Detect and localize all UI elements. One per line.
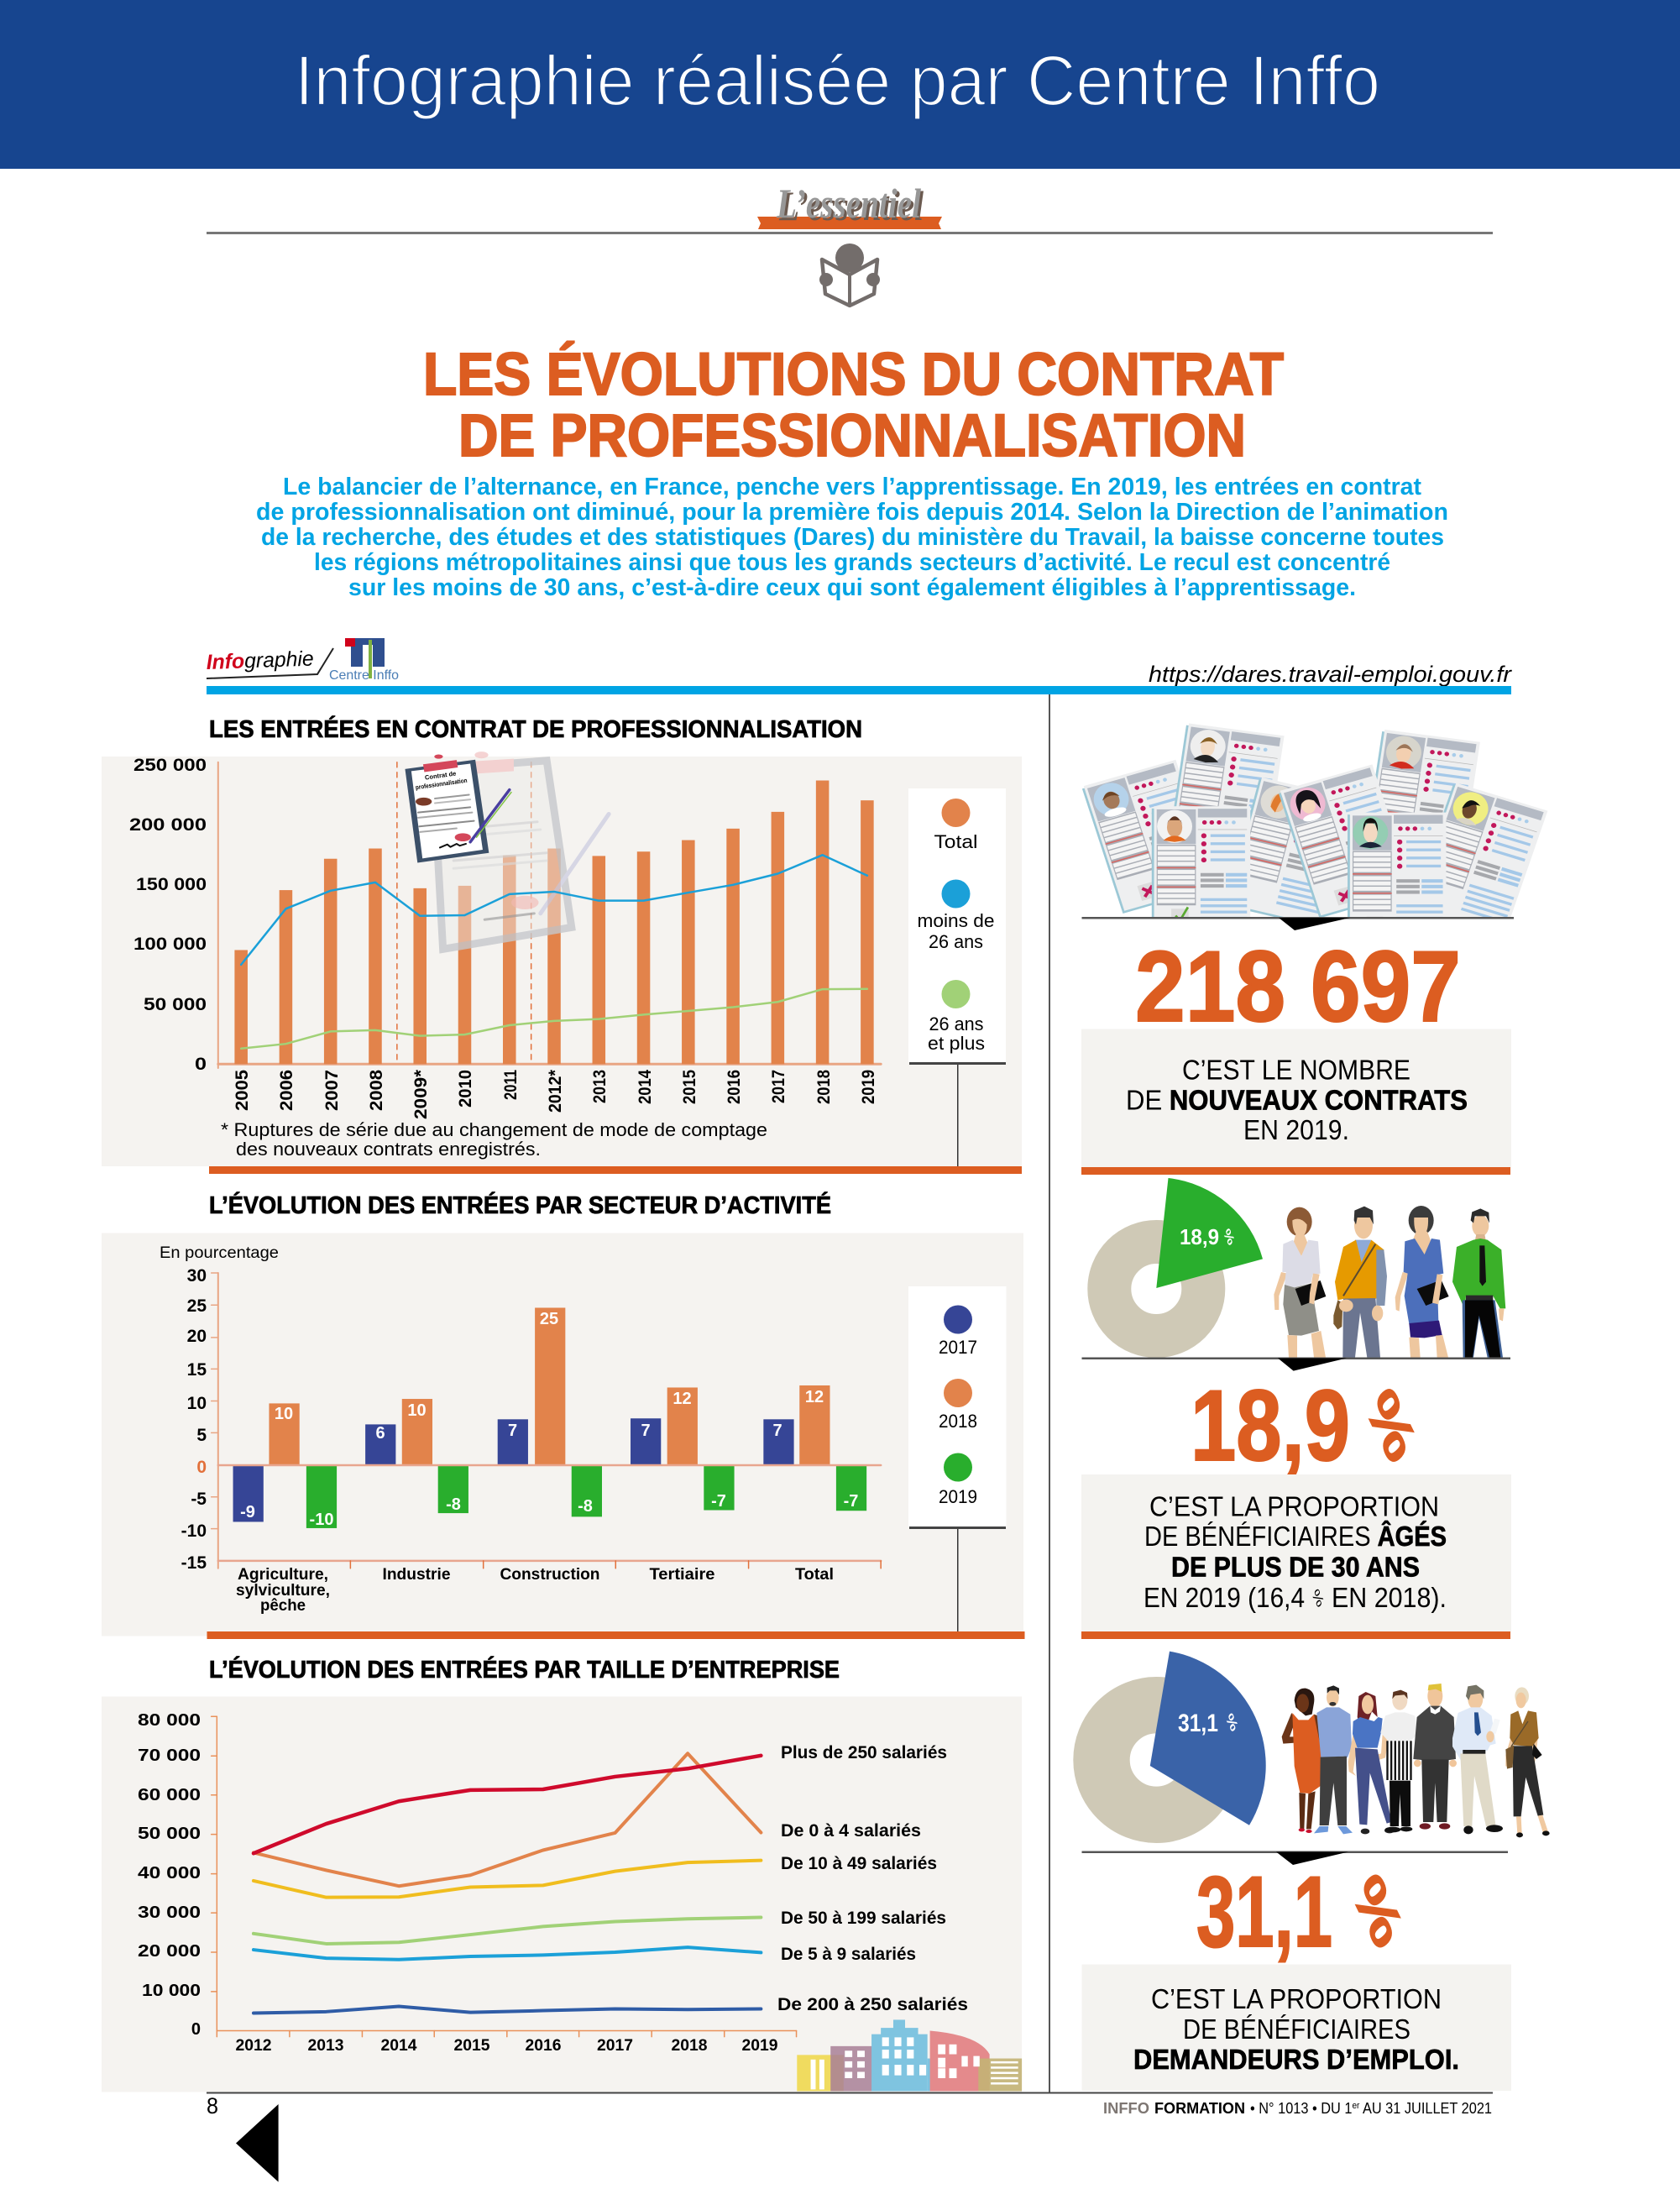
caption box: C’EST LA PROPORTION (1151, 1983, 1442, 2014)
footer: publication line: • N° 1013 • DU 1 (1250, 2100, 1363, 2117)
legend: secteurs: 2019 (939, 1486, 977, 1507)
caption box: C’EST LA PROPORTION (1149, 1491, 1439, 1521)
heading: secteur: L’ÉVOLUTION DES ENTRÉES PAR SECTEUR D’ACTIVITÉ (209, 1191, 831, 1219)
illustration: buildings (797, 2019, 1022, 2092)
legend: entrées: Total (934, 831, 977, 852)
intro paragraph: sur les moins de 30 ans, c’est-à-dire ceux qui sont également éligibles à l’apprentissage. (348, 574, 1356, 601)
x axis years: 2015 (680, 1070, 699, 1104)
arrow: previous page (236, 2104, 279, 2182)
category labels: Tertiaire (650, 1566, 715, 1584)
x axis years: 2008 (367, 1070, 386, 1111)
line: 26 ans et plus (241, 989, 867, 1049)
x axis years: 2013 (590, 1070, 610, 1103)
legend: entrées: et plus (928, 1033, 985, 1054)
heading: taille: L’ÉVOLUTION DES ENTRÉES PAR TAILLE D’ENTREPRISE (209, 1655, 840, 1684)
y axis labels: 0 (195, 1055, 207, 1074)
x axis years: 2005 (233, 1070, 252, 1111)
main title: DE PROFESSIONNALISATION (458, 403, 1246, 469)
caption box: DE NOUVEAUX CONTRATS (1126, 1085, 1468, 1115)
donut chart: 18,9 %: % (1221, 1225, 1238, 1249)
series labels (777, 1743, 968, 2014)
y axis labels: 30 (187, 1266, 207, 1286)
caption box: EN 2019 (16,4 (1144, 1582, 1305, 1613)
bar value labels: 25 (540, 1310, 558, 1328)
caption box: DE BÉNÉFICIAIRES (1183, 2014, 1410, 2045)
bar chart: secteurs (212, 1273, 881, 1568)
caption box: EN 2018). (1332, 1582, 1447, 1613)
panel: secteur d'activité: En pourcentage (160, 1244, 279, 1262)
footnote (221, 1119, 767, 1160)
y axis labels: 40 000 (138, 1864, 201, 1883)
main title: LES ÉVOLUTIONS DU CONTRAT (423, 342, 1284, 408)
y axis labels (181, 1266, 207, 1573)
panel: entrées en contrat (102, 715, 1022, 1174)
y axis labels: 80 000 (138, 1711, 201, 1730)
x axis years: 2007 (322, 1070, 342, 1111)
legend: secteurs: 2018 (939, 1411, 977, 1432)
x axis years: 2016 (725, 1070, 744, 1104)
bar value labels: -10 (310, 1511, 333, 1529)
legend: entrées (908, 788, 1006, 1166)
icon: reader with open book (819, 244, 880, 306)
page number: 8 (207, 2093, 218, 2118)
illustration: seven workers (1282, 1684, 1550, 1837)
illustration: pile of CVs (1081, 723, 1547, 945)
bar value labels: 10 (407, 1401, 427, 1420)
caption box (1081, 1029, 1511, 1175)
illustration: signed contract clipboard (405, 754, 511, 863)
category labels: Industrie (383, 1566, 450, 1584)
y axis labels: 20 (187, 1327, 207, 1346)
category labels: Total (795, 1566, 834, 1584)
footnote: * Ruptures de série due au changement de mode de comptage (221, 1119, 767, 1140)
stat: 31,1 %: % (1342, 1862, 1413, 1961)
legend: secteurs (908, 1286, 1006, 1631)
x axis years: 2018 (814, 1070, 834, 1104)
bar value labels: 7 (772, 1422, 782, 1440)
bar value labels: -8 (446, 1495, 461, 1514)
category labels: sylviculture, (236, 1582, 330, 1600)
bar value labels: 10 (275, 1405, 293, 1423)
y axis labels: 10 000 (142, 1982, 201, 2000)
footnote: des nouveaux contrats enregistrés. (236, 1139, 541, 1160)
y axis labels: 0 (196, 1458, 207, 1477)
main title (423, 342, 1284, 469)
footer: publication line (1103, 2100, 1492, 2117)
caption box: EN 2019. (1243, 1114, 1349, 1145)
line chart: taille (212, 1716, 797, 2037)
illustration: signed contract clipboard: Contrat de (424, 769, 457, 782)
intro paragraph: Le balancier de l’alternance, en France, penche vers l’apprentissage. En 2019, les entrées en contrat (283, 474, 1421, 500)
x axis years: 2019 (742, 2037, 777, 2055)
y axis labels: 200 000 (129, 815, 207, 835)
pointer (1278, 1359, 1347, 1371)
y axis labels: 50 000 (138, 1825, 201, 1843)
bar value labels: 6 (375, 1424, 385, 1443)
header banner (0, 0, 1680, 169)
caption box (1081, 1474, 1511, 1639)
x axis years: 2017 (769, 1070, 788, 1103)
pointer (1276, 1852, 1348, 1865)
donut chart: 31,1 %: % (1222, 1710, 1240, 1735)
donut chart: 31,1 % (1102, 1652, 1266, 1825)
x axis years: 2010 (456, 1070, 475, 1108)
logo: Infographie Centre Inffo (206, 638, 399, 683)
banner title: Infographie réalisée par Centre Inffo (295, 41, 1380, 120)
stat: 18,9 %: 18,9 (1191, 1369, 1350, 1482)
donut chart: 18,9 %: 18,9 (1180, 1224, 1219, 1249)
series labels: De 5 à 9 salariés (781, 1945, 916, 1964)
panel: 31,1 % (1081, 1652, 1550, 2091)
footer: publication line: FORMATION (1154, 2100, 1245, 2117)
panel: 18,9 % (1081, 1178, 1511, 1639)
y axis labels: 5 (196, 1426, 207, 1445)
category labels: Agriculture, (238, 1566, 328, 1584)
x axis years: 2013 (307, 2037, 344, 2055)
donut chart: 18,9 % (1109, 1178, 1263, 1336)
y axis labels: 60 000 (138, 1786, 201, 1804)
bar value labels: 7 (508, 1422, 517, 1440)
x axis years: 2012 (235, 2037, 272, 2055)
x axis years: 2019 (859, 1070, 878, 1104)
series labels: De 50 à 199 salariés (781, 1909, 946, 1928)
y axis labels: 250 000 (133, 756, 207, 775)
y axis labels: 30 000 (138, 1904, 201, 1922)
illustration: signed contract clipboard: professionnalisation (415, 777, 468, 791)
y axis labels (129, 756, 207, 1074)
logo: Infographie Centre Inffo: Infographie (206, 647, 314, 674)
intro paragraph: de la recherche, des études et des statistiques (Dares) du ministère du Travail, la baisse concerne toutes (261, 524, 1444, 551)
x axis years (233, 1069, 878, 1119)
bar value labels: -8 (578, 1497, 593, 1516)
y axis labels: -10 (181, 1521, 207, 1541)
illustration: four professionals (1274, 1206, 1505, 1358)
bar value labels: 7 (641, 1422, 651, 1440)
y axis labels (138, 1711, 201, 2039)
x axis years: 2012* (546, 1069, 565, 1113)
stat: 31,1 %: 31,1 (1196, 1856, 1332, 1968)
x axis years: 2018 (672, 2037, 707, 2055)
caption box: % (1309, 1586, 1327, 1610)
y axis labels: 0 (191, 2020, 201, 2039)
footer: publication line: AU 31 JUILLET 2021 (1359, 2100, 1492, 2117)
intro paragraph: les régions métropolitaines ainsi que tous les grands secteurs d’activité. Le recul est concentré (314, 549, 1390, 576)
illustration: ghost clipboard (433, 751, 609, 949)
caption box: DEMANDEURS D’EMPLOI. (1133, 2044, 1459, 2075)
y axis labels: 20 000 (138, 1942, 201, 1961)
y axis labels: -15 (181, 1553, 207, 1573)
y axis labels: 25 (187, 1296, 207, 1316)
x axis years: 2009* (411, 1069, 431, 1119)
x axis years: 2015 (453, 2037, 490, 2055)
caption box: C’EST LE NOMBRE (1182, 1055, 1410, 1085)
caption box (1081, 1965, 1511, 2091)
caption box: DE BÉNÉFICIAIRES ÂGÉS (1144, 1521, 1447, 1552)
intro paragraph: de professionnalisation ont diminué, pour la première fois depuis 2014. Selon la Direction de l’animation (256, 499, 1448, 526)
panel: taille d'entreprise (102, 1655, 1022, 2092)
logo: Infographie Centre Inffo: Centre Inffo (329, 668, 399, 683)
stat: 218 697: 218 697 (1135, 930, 1461, 1043)
x axis years: 2017 (597, 2037, 633, 2055)
bar value labels: -7 (711, 1492, 726, 1511)
legend: entrées: 26 ans (929, 931, 983, 952)
x axis years: 2016 (526, 2037, 561, 2055)
x axis years: 2014 (636, 1070, 655, 1104)
y axis labels: 15 (187, 1360, 207, 1380)
x axis years (235, 2037, 777, 2055)
y axis labels: 150 000 (136, 875, 207, 894)
series labels: De 10 à 49 salariés (781, 1854, 937, 1873)
category labels: pêche (260, 1597, 306, 1615)
pointer (1279, 918, 1350, 930)
heading: entrées: LES ENTRÉES EN CONTRAT DE PROFESSIONNALISATION (209, 715, 862, 743)
panel: 218 697 (1081, 723, 1547, 1175)
x axis years: 2006 (277, 1070, 296, 1111)
y axis labels: -5 (191, 1490, 207, 1509)
footer: publication line: er (1352, 2101, 1360, 2111)
series labels: De 200 à 250 salariés (777, 1995, 968, 2014)
legend: entrées: moins de (917, 910, 994, 931)
series labels: Plus de 250 salariés (781, 1743, 947, 1762)
bar chart: total (218, 762, 881, 1068)
category labels: Construction (500, 1566, 599, 1584)
intro paragraph (256, 474, 1448, 601)
rubric: L'essentiel: L’essentiel (776, 180, 921, 227)
series labels: De 0 à 4 salariés (781, 1821, 921, 1841)
category labels (236, 1566, 834, 1615)
legend: secteurs: 2017 (939, 1337, 977, 1358)
rubric: L'essentiel: L’essentiel (778, 182, 924, 229)
x axis years: 2011 (501, 1070, 521, 1100)
y axis labels: 10 (187, 1394, 207, 1413)
stat: 18,9 %: % (1355, 1376, 1426, 1475)
bar value labels (240, 1310, 858, 1529)
line: moins de 26 ans (241, 855, 867, 965)
footer: publication line: INFFO (1103, 2100, 1149, 2117)
legend: entrées: 26 ans (929, 1013, 984, 1034)
bar value labels: -9 (240, 1503, 255, 1521)
bar value labels: -7 (844, 1492, 858, 1511)
y axis labels: 50 000 (144, 995, 207, 1014)
bar value labels: 12 (805, 1388, 824, 1406)
caption box: DE PLUS DE 30 ANS (1171, 1552, 1420, 1582)
panel: secteur d'activité (102, 1191, 1024, 1639)
source url: https://dares.travail-emploi.gouv.fr (1149, 662, 1512, 687)
y axis labels: 100 000 (133, 935, 207, 954)
donut chart: 31,1 %: 31,1 (1178, 1710, 1218, 1737)
x axis years: 2014 (381, 2037, 417, 2055)
bar value labels: 12 (673, 1390, 692, 1408)
y axis labels: 70 000 (138, 1746, 201, 1765)
